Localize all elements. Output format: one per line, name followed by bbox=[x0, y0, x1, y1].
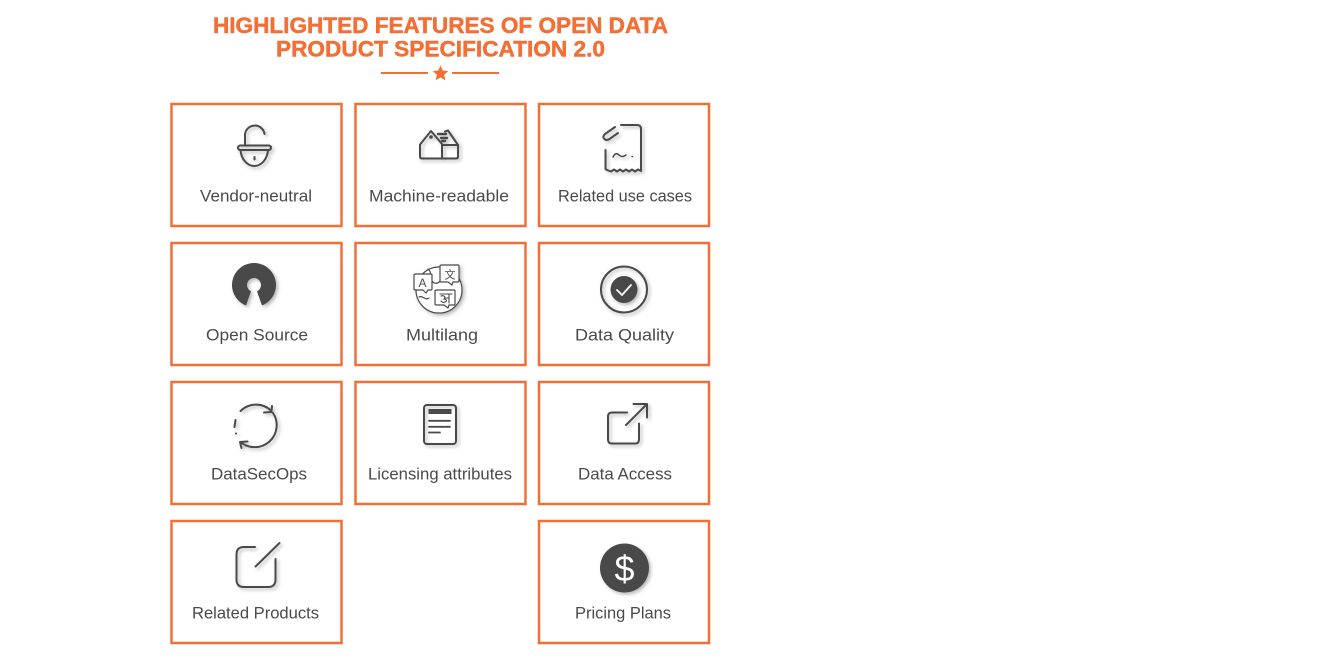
icon letters: A and wen bbox=[418, 268, 456, 290]
title divider with star bbox=[381, 66, 499, 80]
panel: DataSecOps bbox=[172, 382, 342, 504]
panel: Machine-readable bbox=[356, 104, 526, 226]
panel: Data Quality bbox=[539, 243, 709, 365]
title: HIGHLIGHTED FEATURES OF OPEN DATA bbox=[213, 13, 668, 38]
panel: Licensing attributes bbox=[356, 382, 526, 504]
icon: check badge bbox=[601, 266, 647, 312]
icon: document with signature bbox=[603, 125, 641, 172]
label: DataSecOps bbox=[211, 464, 307, 484]
panel: Vendor-neutral bbox=[172, 104, 342, 226]
label: Related use cases bbox=[558, 186, 692, 206]
icon: globe with language bubbles bbox=[414, 265, 462, 313]
label: Licensing attributes bbox=[368, 464, 512, 484]
panel: Multilang bbox=[356, 243, 526, 365]
title bbox=[213, 13, 668, 62]
panel: Pricing Plans bbox=[539, 521, 709, 643]
icon: license document bbox=[424, 405, 456, 444]
label: Pricing Plans bbox=[575, 604, 671, 622]
panel: Related Products bbox=[172, 521, 342, 643]
label: Multilang bbox=[406, 326, 478, 344]
panel: Open Source bbox=[172, 243, 342, 365]
panel: Related use cases bbox=[539, 104, 709, 226]
label: Data Quality bbox=[575, 326, 675, 344]
label: Machine-readable bbox=[369, 186, 509, 206]
label: Related Products bbox=[192, 604, 319, 622]
icon: open padlock bbox=[238, 126, 271, 166]
icon: refresh cycle bbox=[234, 405, 277, 448]
label: Data Access bbox=[578, 464, 672, 484]
panel: Data Access bbox=[539, 382, 709, 504]
label: Vendor-neutral bbox=[200, 186, 312, 206]
icon: edit square bbox=[236, 543, 280, 587]
icon: external link bbox=[608, 404, 647, 444]
icon letters: A and wen: A bbox=[418, 276, 427, 290]
title: PRODUCT SPECIFICATION 2.0 bbox=[276, 36, 605, 62]
icon: dollar coin: $ bbox=[614, 548, 635, 589]
icon: tags bbox=[420, 130, 458, 158]
label: Open Source bbox=[206, 326, 308, 344]
icon: open source logo bbox=[232, 263, 276, 306]
icon: dollar coin bbox=[600, 544, 649, 592]
icon letters: A and wen: 文 bbox=[444, 268, 456, 282]
